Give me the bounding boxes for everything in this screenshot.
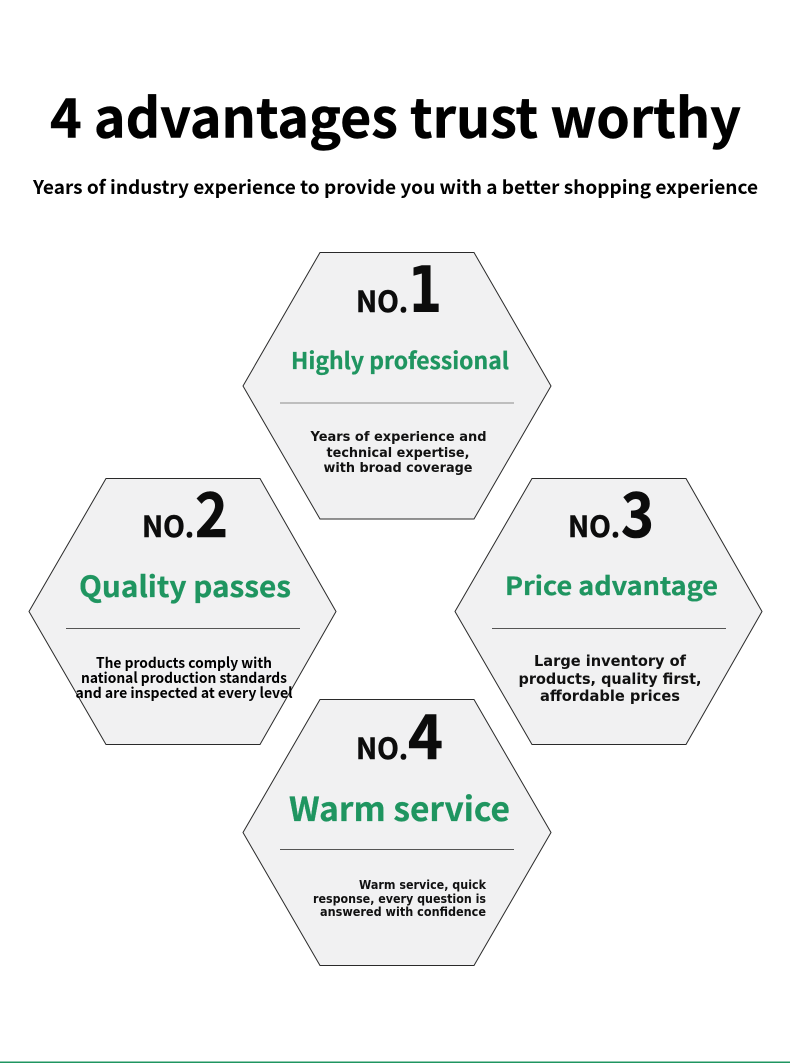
panel: hexagon 2 quality passes bbox=[29, 465, 336, 744]
heading 1: Highly professional bbox=[291, 342, 509, 376]
panel: hexagon 1 highly professional bbox=[243, 252, 551, 519]
description 3 bbox=[518, 652, 702, 705]
description 1: Years of experience and bbox=[310, 429, 486, 445]
description 2: The products comply with bbox=[96, 652, 272, 673]
number 3: NO. bbox=[568, 504, 620, 546]
number 1: 1 bbox=[408, 254, 442, 328]
number 1: NO. bbox=[356, 279, 408, 321]
heading 3: Price advantage bbox=[505, 567, 718, 603]
description 3: products, quality first, bbox=[518, 670, 702, 688]
number 4 bbox=[356, 687, 443, 777]
description 4: Warm service, quick bbox=[359, 878, 487, 892]
hexagon 2 shape bbox=[29, 478, 336, 744]
number 2: 2 bbox=[195, 465, 228, 555]
number 3 bbox=[568, 465, 654, 555]
description 2 bbox=[76, 652, 293, 703]
description 4: response, every question is bbox=[313, 892, 486, 906]
bottom green rule bbox=[0, 1062, 790, 1063]
description 4 bbox=[313, 878, 487, 919]
description 2: national production standards bbox=[81, 667, 287, 688]
description 3: Large inventory of bbox=[534, 652, 686, 670]
heading 2: Quality passes bbox=[79, 564, 291, 606]
hexagon 3 shape bbox=[455, 478, 762, 744]
number 4: 4 bbox=[408, 687, 443, 777]
description 1 bbox=[310, 429, 486, 476]
description 1: with broad coverage bbox=[324, 460, 472, 476]
description 4: answered with confidence bbox=[320, 905, 486, 919]
panel: hexagon 4 warm service bbox=[243, 687, 551, 966]
heading 4: Warm service bbox=[289, 783, 510, 831]
number 3: 3 bbox=[621, 465, 654, 555]
description 3: affordable prices bbox=[540, 687, 680, 705]
panel: hexagon 3 price advantage bbox=[455, 465, 762, 744]
number 2 bbox=[142, 465, 228, 555]
title: 4 advantages trust worthy bbox=[50, 74, 741, 154]
number 2: NO. bbox=[142, 504, 194, 546]
description 1: technical expertise, bbox=[326, 445, 470, 461]
hexagon 1 shape bbox=[243, 252, 551, 519]
description 2: and are inspected at every level bbox=[76, 682, 293, 703]
hexagon 4 shape bbox=[243, 700, 551, 966]
number 4: NO. bbox=[356, 726, 408, 768]
number 1 bbox=[356, 254, 442, 328]
subtitle: Years of industry experience to provide you with a better shopping experience bbox=[32, 173, 758, 200]
